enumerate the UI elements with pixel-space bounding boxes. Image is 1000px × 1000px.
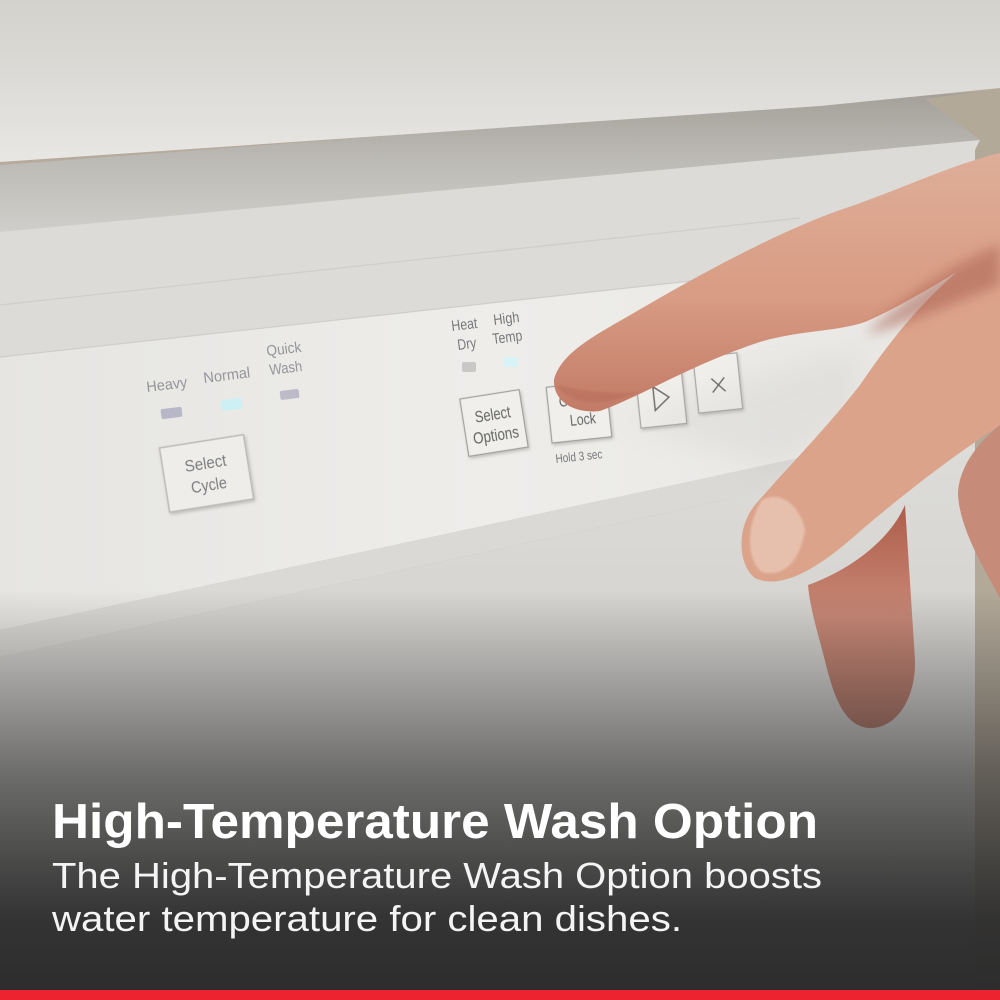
panel: control strip <box>0 240 975 630</box>
back finger <box>808 505 915 728</box>
hold note: Hold 3 sec <box>555 447 603 466</box>
Select Options button: Select <box>473 402 512 427</box>
option labels: Heat <box>450 315 479 335</box>
option labels: High <box>492 309 520 329</box>
Select Cycle button <box>160 435 254 512</box>
countertop panel <box>0 0 1000 162</box>
description <box>51 855 822 939</box>
option controls <box>450 309 743 466</box>
fingertip underside shading <box>556 385 640 402</box>
description: The High-Temperature Wash Option boosts <box>52 855 822 896</box>
start button <box>635 364 687 428</box>
Control Lock button: Control <box>558 390 600 411</box>
heading: High-Temperature Wash Option <box>52 795 818 849</box>
cycle labels: Wash <box>268 358 303 379</box>
cycle labels <box>145 339 303 396</box>
recessed lip under counter <box>0 90 1000 232</box>
right cabinet side <box>925 89 1000 1000</box>
cancel button <box>693 353 743 413</box>
Control Lock button <box>546 381 612 443</box>
red footer bar <box>0 990 1000 1000</box>
lower door <box>0 446 975 1000</box>
Select Cycle button: Select <box>183 451 228 476</box>
panel bottom edge <box>0 420 975 657</box>
hand shadow <box>620 350 860 470</box>
option labels <box>450 309 523 354</box>
palm and index finger <box>554 153 1000 411</box>
hand <box>554 153 1000 728</box>
cycle labels: Quick <box>265 339 303 360</box>
Select Cycle button: Cycle <box>190 473 228 497</box>
cycle labels: Heavy <box>145 374 189 396</box>
description: water temperature for clean dishes. <box>51 898 682 939</box>
panel crease line <box>0 218 800 357</box>
knuckle crease shading <box>865 245 1000 335</box>
fingertip nail <box>750 497 805 573</box>
middle finger and thumb base <box>741 240 1000 582</box>
Select Options button <box>460 390 528 456</box>
Control Lock button: Lock <box>569 410 597 430</box>
right finger <box>958 425 1000 598</box>
cycle labels: Normal <box>202 364 251 387</box>
option labels: Temp <box>491 327 523 348</box>
cycle controls <box>145 339 303 512</box>
door top face <box>0 110 980 500</box>
cycle indicator lights <box>160 389 300 419</box>
Select Options button: Options <box>472 422 520 448</box>
option labels: Dry <box>456 335 478 354</box>
option indicator lights <box>462 357 518 372</box>
bottom dark gradient <box>0 590 1000 1000</box>
